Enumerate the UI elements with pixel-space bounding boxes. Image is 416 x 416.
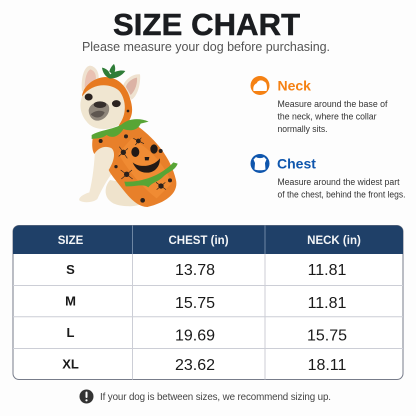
subtitle: Please measure your dog before purchasing. (82, 40, 330, 54)
row S (66, 262, 347, 279)
chest description: Measure around the widest part (278, 177, 400, 187)
row L: 15.75 (307, 328, 347, 344)
chest heading: Chest (277, 156, 316, 172)
row M: 15.75 (175, 295, 215, 312)
row M: 11.81 (308, 295, 347, 312)
neck heading: Neck (278, 78, 311, 94)
dog head (80, 85, 125, 129)
front leg (79, 146, 115, 202)
table header (13, 226, 403, 254)
dog face (85, 93, 129, 121)
chest description (278, 177, 406, 200)
row M: M (65, 294, 76, 308)
warning icon (80, 390, 94, 404)
row XL: XL (62, 356, 79, 372)
row XL (62, 356, 347, 374)
rear haunch (106, 180, 140, 206)
row S: 11.81 (308, 262, 347, 279)
neck description (278, 99, 388, 134)
neck icon (250, 76, 270, 95)
table header: NECK (in) (307, 235, 361, 247)
green leaf collar (92, 119, 149, 139)
row L: 19.69 (175, 328, 215, 344)
row M (65, 294, 347, 312)
chest icon (250, 154, 270, 173)
title: SIZE CHART (113, 7, 300, 42)
sizing note: If your dog is between sizes, we recommend sizing up. (100, 392, 331, 403)
row L: L (67, 325, 75, 340)
row S: 13.78 (175, 262, 215, 279)
size table (13, 226, 403, 380)
table header: SIZE (58, 235, 84, 247)
row L (67, 325, 347, 344)
row XL: 23.62 (175, 357, 215, 374)
ears (82, 66, 99, 92)
dog in pumpkin costume photo (79, 64, 178, 207)
neck description: normally sits. (278, 124, 328, 134)
hood (82, 77, 132, 127)
row XL: 18.11 (308, 357, 347, 374)
green stem leaves (102, 64, 125, 79)
green leaf belt (124, 162, 178, 187)
spiders (99, 135, 172, 202)
table header: CHEST (in) (168, 235, 229, 247)
neck description: Measure around the base of (278, 99, 388, 109)
pumpkin costume body (92, 125, 176, 207)
row S: S (66, 262, 75, 277)
chest description: of the chest, behind the front legs. (278, 190, 406, 200)
neck description: the neck, where the collar (278, 112, 376, 122)
jack-o-lantern face (131, 144, 160, 173)
